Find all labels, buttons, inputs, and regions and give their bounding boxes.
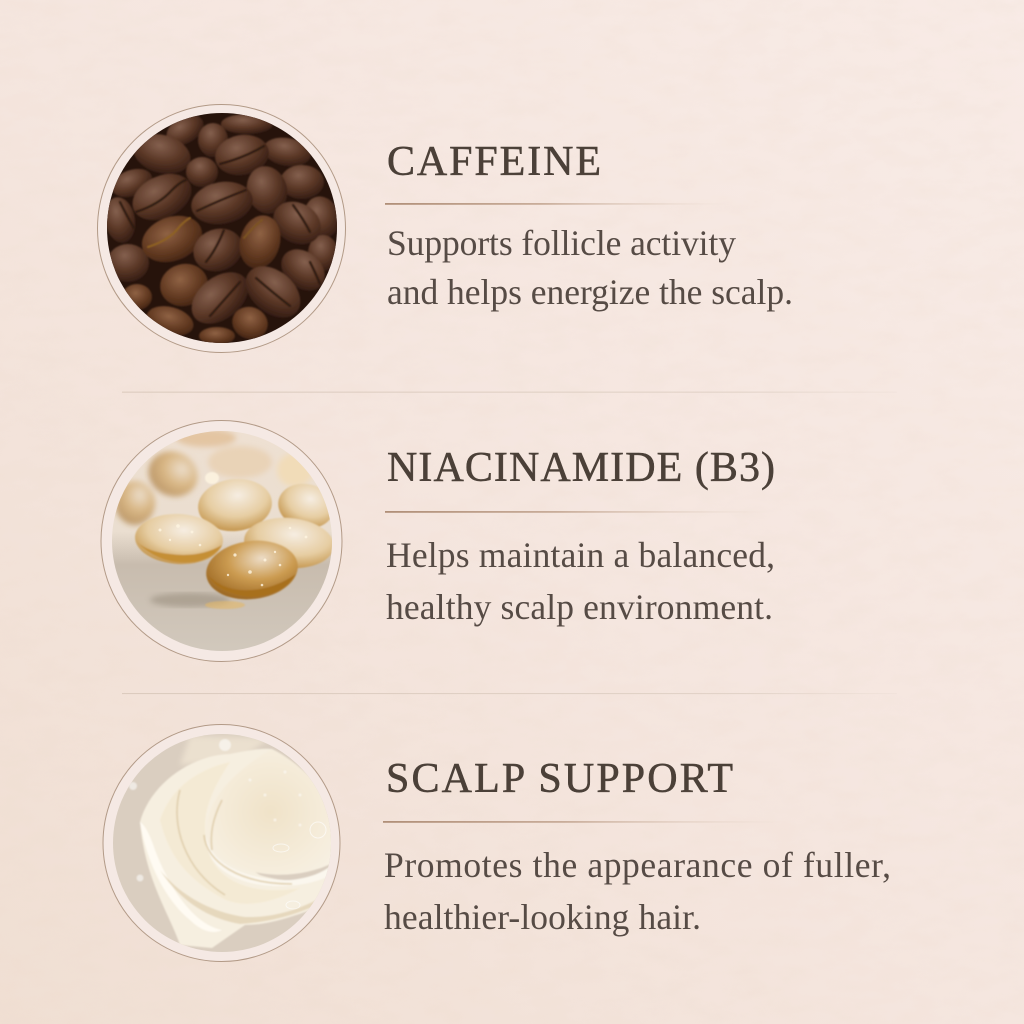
text: scalp support description: Promotes the appearance of fuller, (384, 845, 891, 885)
heading: caffeine: CAFFEINE (387, 139, 601, 185)
panel: niacinamide (101, 420, 775, 662)
rule: scalp support (383, 821, 788, 823)
icon: coffee beans photo circle (98, 104, 346, 352)
text: niacinamide description (386, 535, 775, 627)
text: caffeine description: and helps energize the scalp. (387, 272, 793, 312)
panel: scalp support (103, 724, 891, 962)
divider 1 (122, 392, 897, 393)
text: niacinamide description: Helps maintain a balanced, (386, 535, 775, 575)
text: scalp support description (384, 845, 891, 937)
divider 2 (122, 693, 897, 694)
text: niacinamide description: healthy scalp environment. (386, 587, 773, 627)
text: caffeine description: Supports follicle activity (387, 223, 736, 263)
rule: caffeine (385, 203, 730, 205)
text: scalp support description: healthier-looking hair. (384, 897, 701, 937)
icon: golden capsules photo circle (101, 420, 342, 662)
icon: cream swirl photo circle (103, 724, 340, 962)
text: caffeine description (387, 223, 793, 312)
panel: caffeine (98, 104, 793, 352)
rule: niacinamide (385, 511, 770, 513)
heading: scalp support: SCALP SUPPORT (386, 756, 733, 802)
heading: niacinamide: NIACINAMIDE (B3) (387, 445, 775, 491)
